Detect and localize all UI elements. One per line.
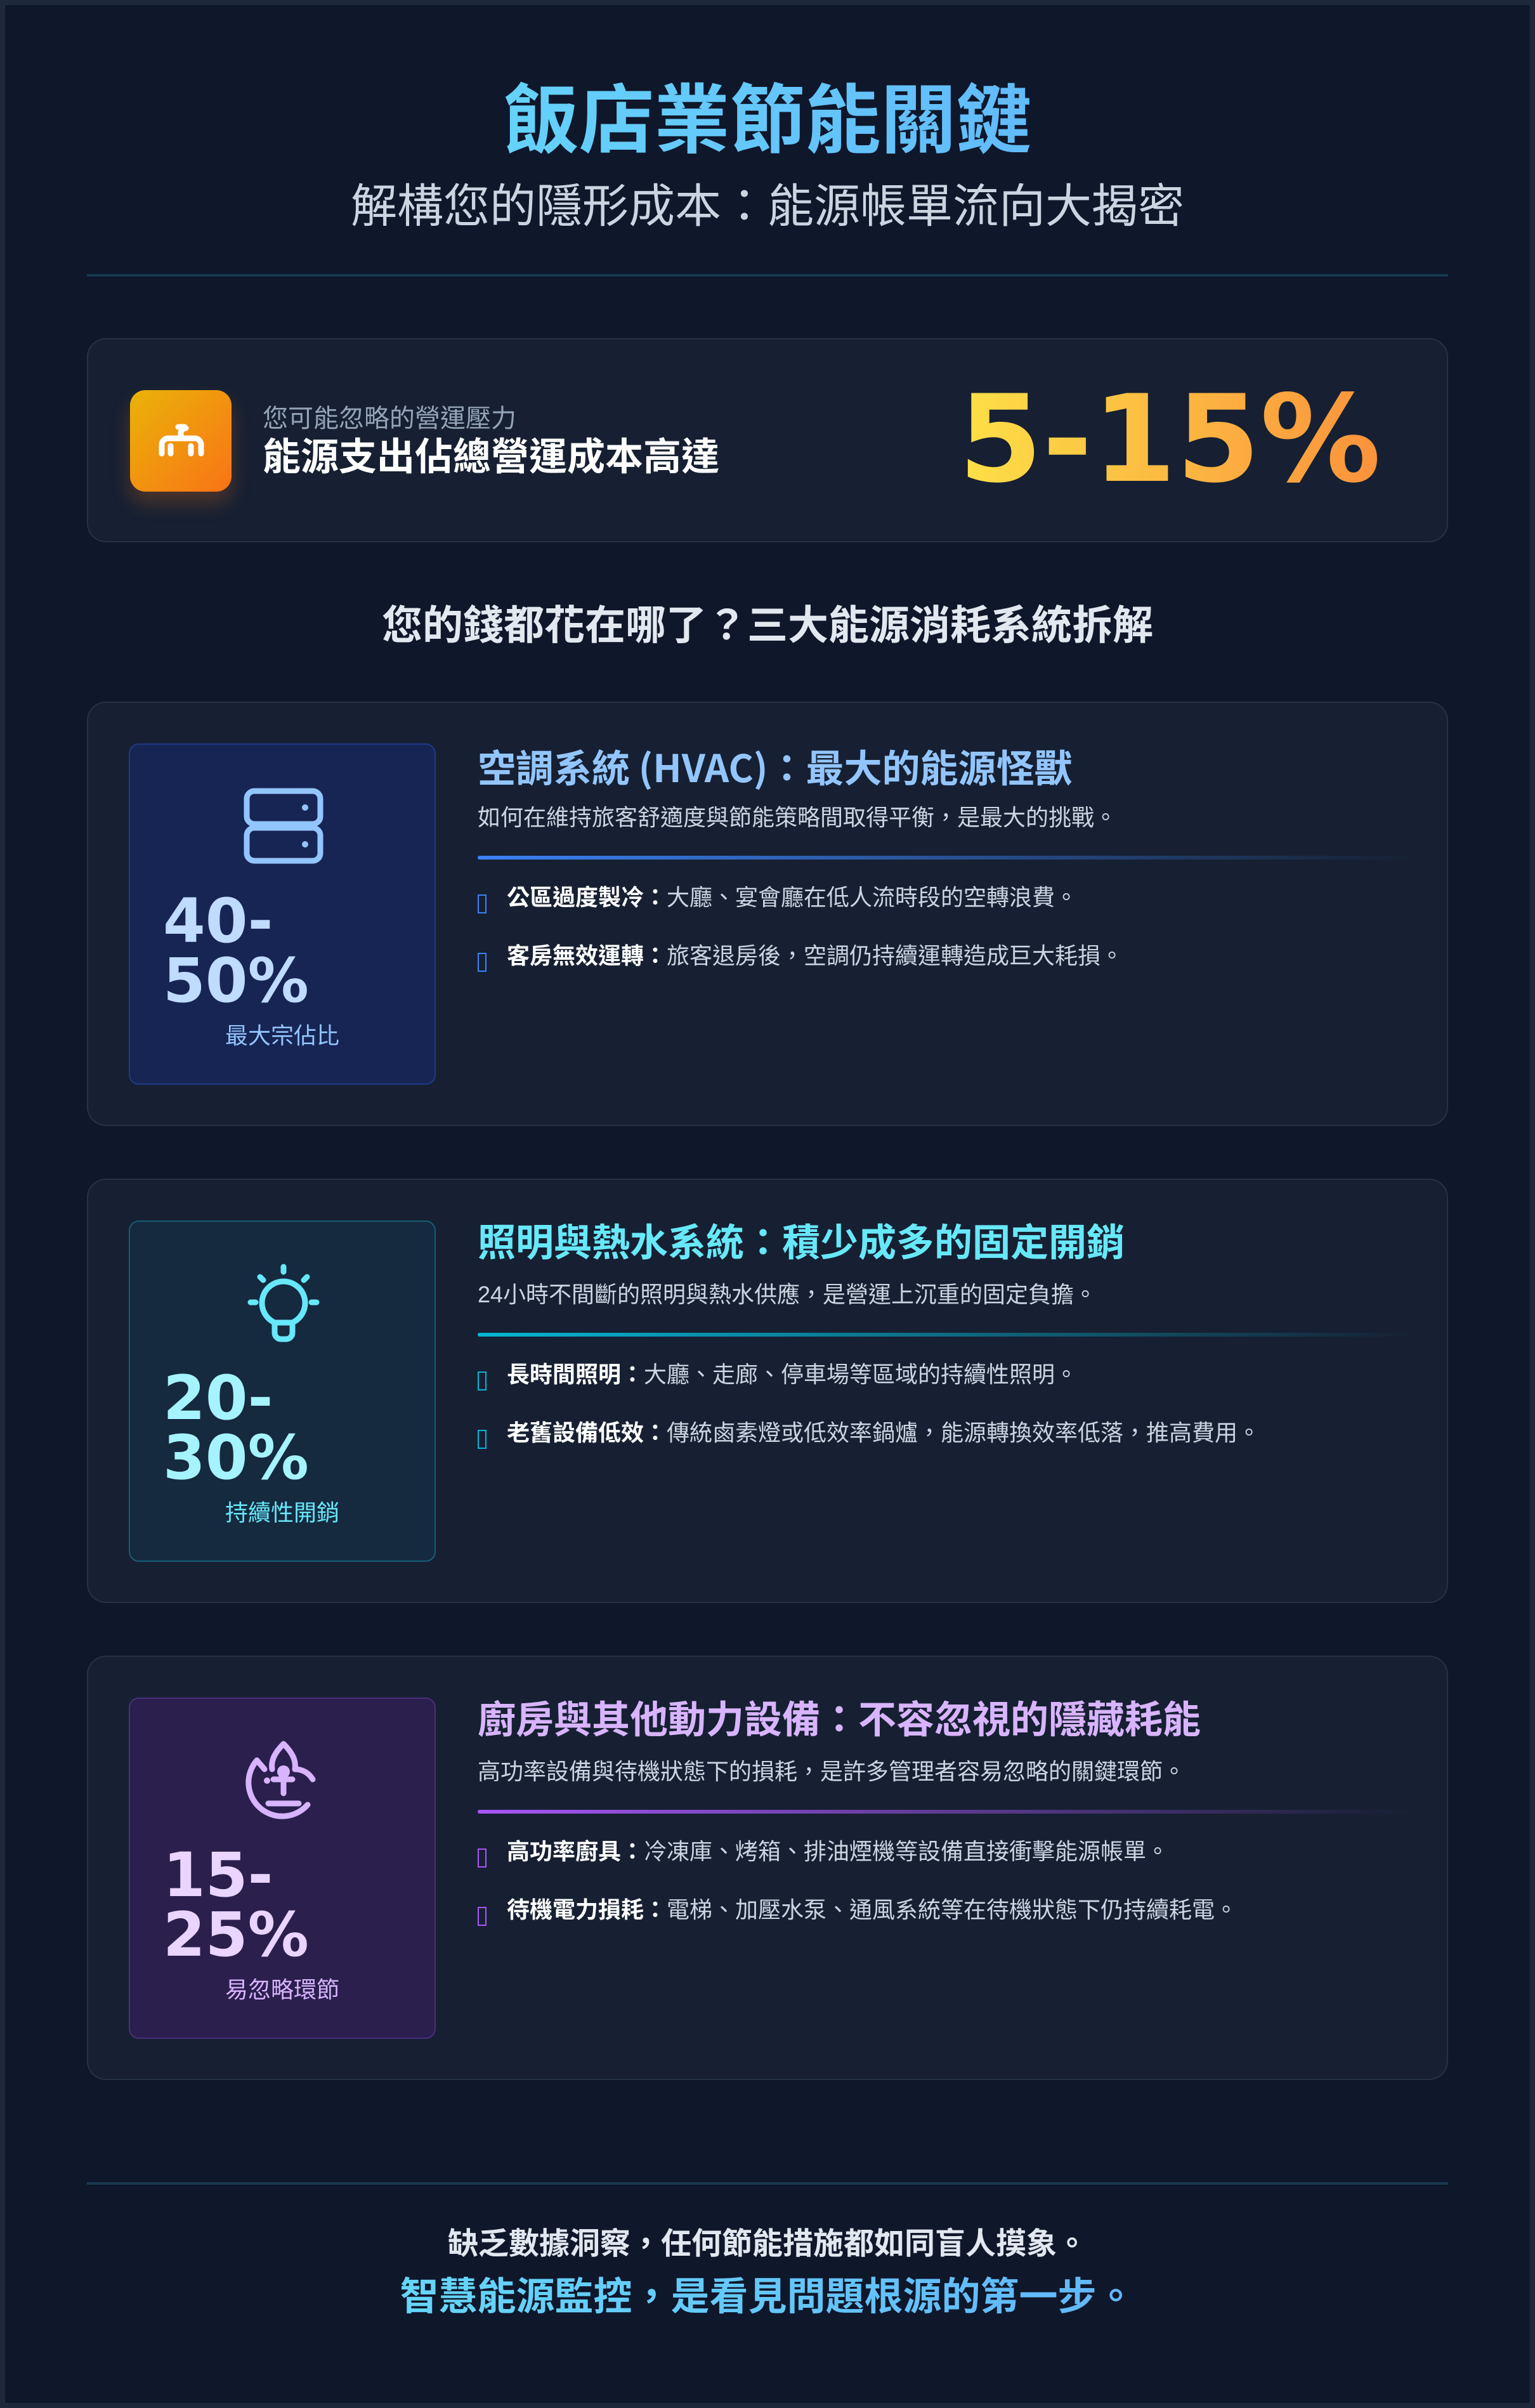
bullet: 客房無效運轉：旅客退房後，空調仍持續運轉造成巨大耗損。 <box>507 943 1123 969</box>
big number: 5-15% <box>958 369 1381 509</box>
title: 飯店業節能關鍵 <box>504 79 1031 163</box>
panel: stat card <box>87 338 1448 542</box>
text: stat label small: 您可能忽略的營運壓力 <box>263 405 516 433</box>
heading: kitchen: 廚房與其他動力設備：不容忽視的隱藏耗能 <box>478 1699 1201 1741</box>
footer text: 缺乏數據洞察，任何節能措施都如同盲人摸象。 <box>448 2227 1087 2261</box>
bullet: 公區過度製冷：大廳、宴會廳在低人流時段的空轉浪費。 <box>507 884 1078 910</box>
stat box: HVAC: 最大宗佔比 <box>225 1023 339 1049</box>
stat box: lighting: 20- <box>163 1363 273 1434</box>
bullet: 高功率廚具：冷凍庫、烤箱、排油煙機等設備直接衝擊能源帳單。 <box>507 1838 1169 1864</box>
heading: HVAC: 空調系統 (HVAC)：最大的能源怪獸 <box>478 738 1072 794</box>
stat box: HVAC: 40- <box>163 886 273 957</box>
bullet: 老舊設備低效：傳統鹵素燈或低效率鍋爐，能源轉換效率低落，推高費用。 <box>507 1420 1260 1446</box>
stat box: kitchen: 25% <box>163 1899 309 1970</box>
panel: HVAC: 如何在維持旅客舒適度與節能策略間取得平衡，是最大的挑戰。 <box>478 804 1117 830</box>
icon: lightbulb <box>247 1264 320 1342</box>
stat box: HVAC <box>129 743 436 1085</box>
panel: lighting <box>87 1179 1448 1603</box>
panel: kitchen: 高功率設備與待機狀態下的損耗，是許多管理者容易忽略的關鍵環節。 <box>478 1758 1186 1784</box>
stat box: lighting: 30% <box>163 1422 309 1493</box>
icon: server <box>244 788 323 864</box>
heading: lighting: 照明與熱水系統：積少成多的固定開銷 <box>478 1222 1125 1264</box>
stat box: lighting: 持續性開銷 <box>225 1500 339 1526</box>
stat box: lighting <box>129 1220 436 1562</box>
section heading: 您的錢都花在哪了？三大能源消耗系統拆解 <box>382 603 1153 648</box>
icon: plumbing <box>130 390 232 492</box>
stat box: kitchen: 15- <box>163 1840 273 1911</box>
panel: HVAC <box>87 702 1448 1126</box>
bullet: 待機電力損耗：電梯、加壓水泵、通風系統等在待機狀態下仍持續耗電。 <box>507 1897 1238 1923</box>
panel: kitchen <box>87 1656 1448 2080</box>
stat box: HVAC: 50% <box>163 945 309 1016</box>
icon: kitchen power <box>245 1741 316 1819</box>
stat box: kitchen: 易忽略環節 <box>225 1977 339 2003</box>
panel: lighting: 24小時不間斷的照明與熱水供應，是營運上沉重的固定負擔。 <box>478 1281 1097 1307</box>
text: stat label main: 能源支出佔總營運成本高達 <box>263 436 719 478</box>
bullet: 長時間照明：大廳、走廊、停車場等區域的持續性照明。 <box>507 1361 1078 1387</box>
subtitle: 解構您的隱形成本：能源帳單流向大揭密 <box>351 181 1184 232</box>
title <box>0 80 1535 162</box>
footer highlight: 智慧能源監控，是看見問題根源的第一步。 <box>400 2275 1135 2318</box>
stat box: kitchen <box>129 1698 436 2039</box>
footer highlight <box>0 2274 1535 2319</box>
